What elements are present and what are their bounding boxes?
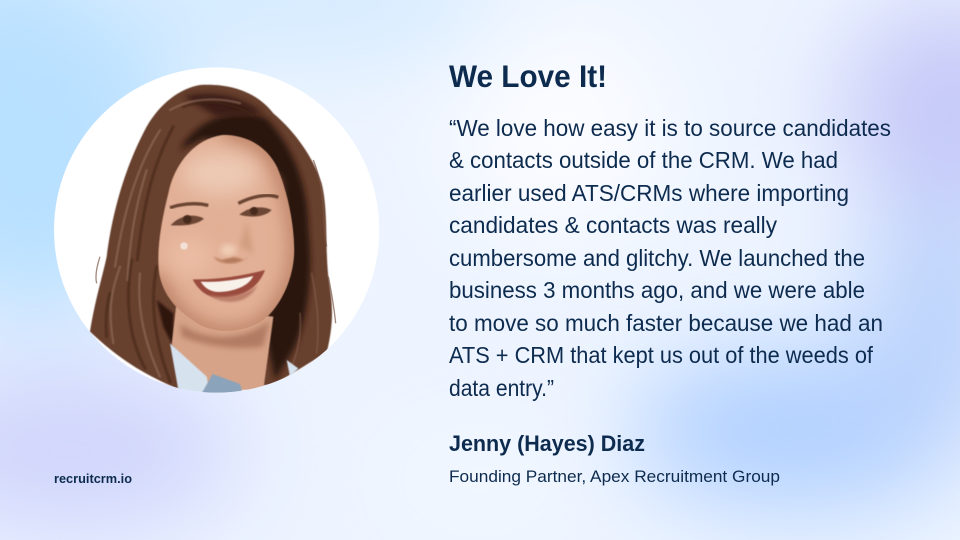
- collar: [170, 343, 210, 393]
- cheek shine: [180, 242, 188, 250]
- quote text: ATS + CRM that kept us out of the weeds of: [449, 342, 874, 368]
- quote text: cumbersome and glitchy. We launched the: [449, 245, 865, 271]
- heading: We Love It!: [449, 58, 607, 94]
- quote text: candidates & contacts was really: [449, 212, 777, 238]
- quote text: business 3 months ago, and we were able: [449, 277, 865, 303]
- attribution name: Jenny (Hayes) Diaz: [449, 431, 645, 456]
- shirt shadow: [202, 374, 243, 395]
- quote text: data entry.”: [449, 375, 554, 401]
- quote text: “We love how easy it is to source candidates: [449, 115, 891, 141]
- nose: [214, 256, 246, 264]
- brand: recruitcrm.io: recruitcrm.io: [54, 471, 132, 486]
- quote text: & contacts outside of the CRM. We had: [449, 147, 838, 173]
- quote text: [449, 115, 891, 401]
- neck: [172, 307, 273, 390]
- quote text: to move so much faster because we had an: [449, 310, 883, 336]
- eyebrows: [170, 195, 278, 208]
- portrait photo: [54, 67, 379, 395]
- mouth: [193, 270, 265, 298]
- face shading: [156, 132, 298, 335]
- hair wisps: [96, 160, 336, 323]
- photo white circle: [54, 67, 379, 393]
- hair: [90, 85, 332, 388]
- chin shadow: [180, 320, 270, 348]
- attribution role: Founding Partner, Apex Recruitment Group: [449, 467, 780, 486]
- quote text: earlier used ATS/CRMs where importing: [449, 180, 849, 206]
- face: [158, 135, 294, 331]
- eyes: [171, 216, 204, 226]
- hair shadow: [180, 113, 310, 380]
- hair strands: [106, 99, 318, 382]
